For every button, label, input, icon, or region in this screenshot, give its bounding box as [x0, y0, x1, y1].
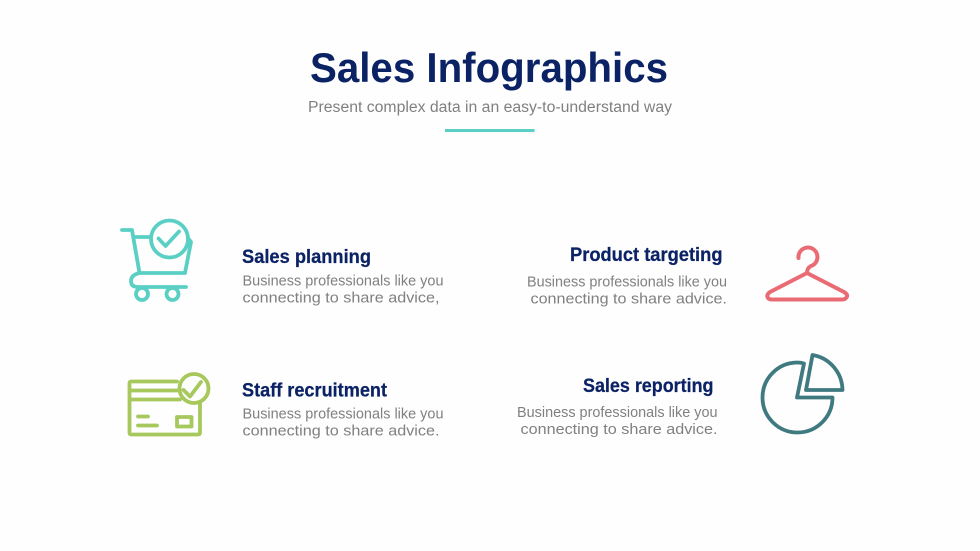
panel: product targeting: Product targeting [570, 245, 722, 266]
subtitle: Present complex data in an easy-to-understand way [308, 99, 672, 116]
title: Sales Infographics [310, 44, 668, 91]
panel: staff recruitment: Staff recruitment [242, 380, 388, 402]
panel: staff recruitment: connecting to share advice. [242, 422, 440, 440]
panel: sales reporting: Business professionals like you [517, 404, 718, 421]
panel: product targeting: connecting to share advice. [530, 290, 727, 308]
panel: sales reporting: Sales reporting [583, 376, 714, 397]
panel: sales reporting [517, 376, 718, 438]
panel: product targeting: Business professionals like you [527, 274, 727, 290]
panel: sales reporting: connecting to share advice. [520, 421, 718, 438]
panel: sales planning: connecting to share advice, [242, 290, 440, 306]
panel: product targeting [527, 245, 727, 308]
icon: hanger [767, 248, 847, 300]
panel: sales planning [242, 247, 444, 306]
icon: shopping cart with check [122, 220, 191, 300]
icon: credit card with check [130, 374, 208, 434]
panel: sales planning: Business professionals like you [242, 272, 444, 290]
panel: staff recruitment [242, 380, 444, 440]
panel: staff recruitment: Business professionals like you [242, 406, 444, 422]
panel: sales planning: Sales planning [242, 247, 371, 268]
icon: pie chart [763, 355, 842, 432]
accent underline [445, 129, 534, 132]
